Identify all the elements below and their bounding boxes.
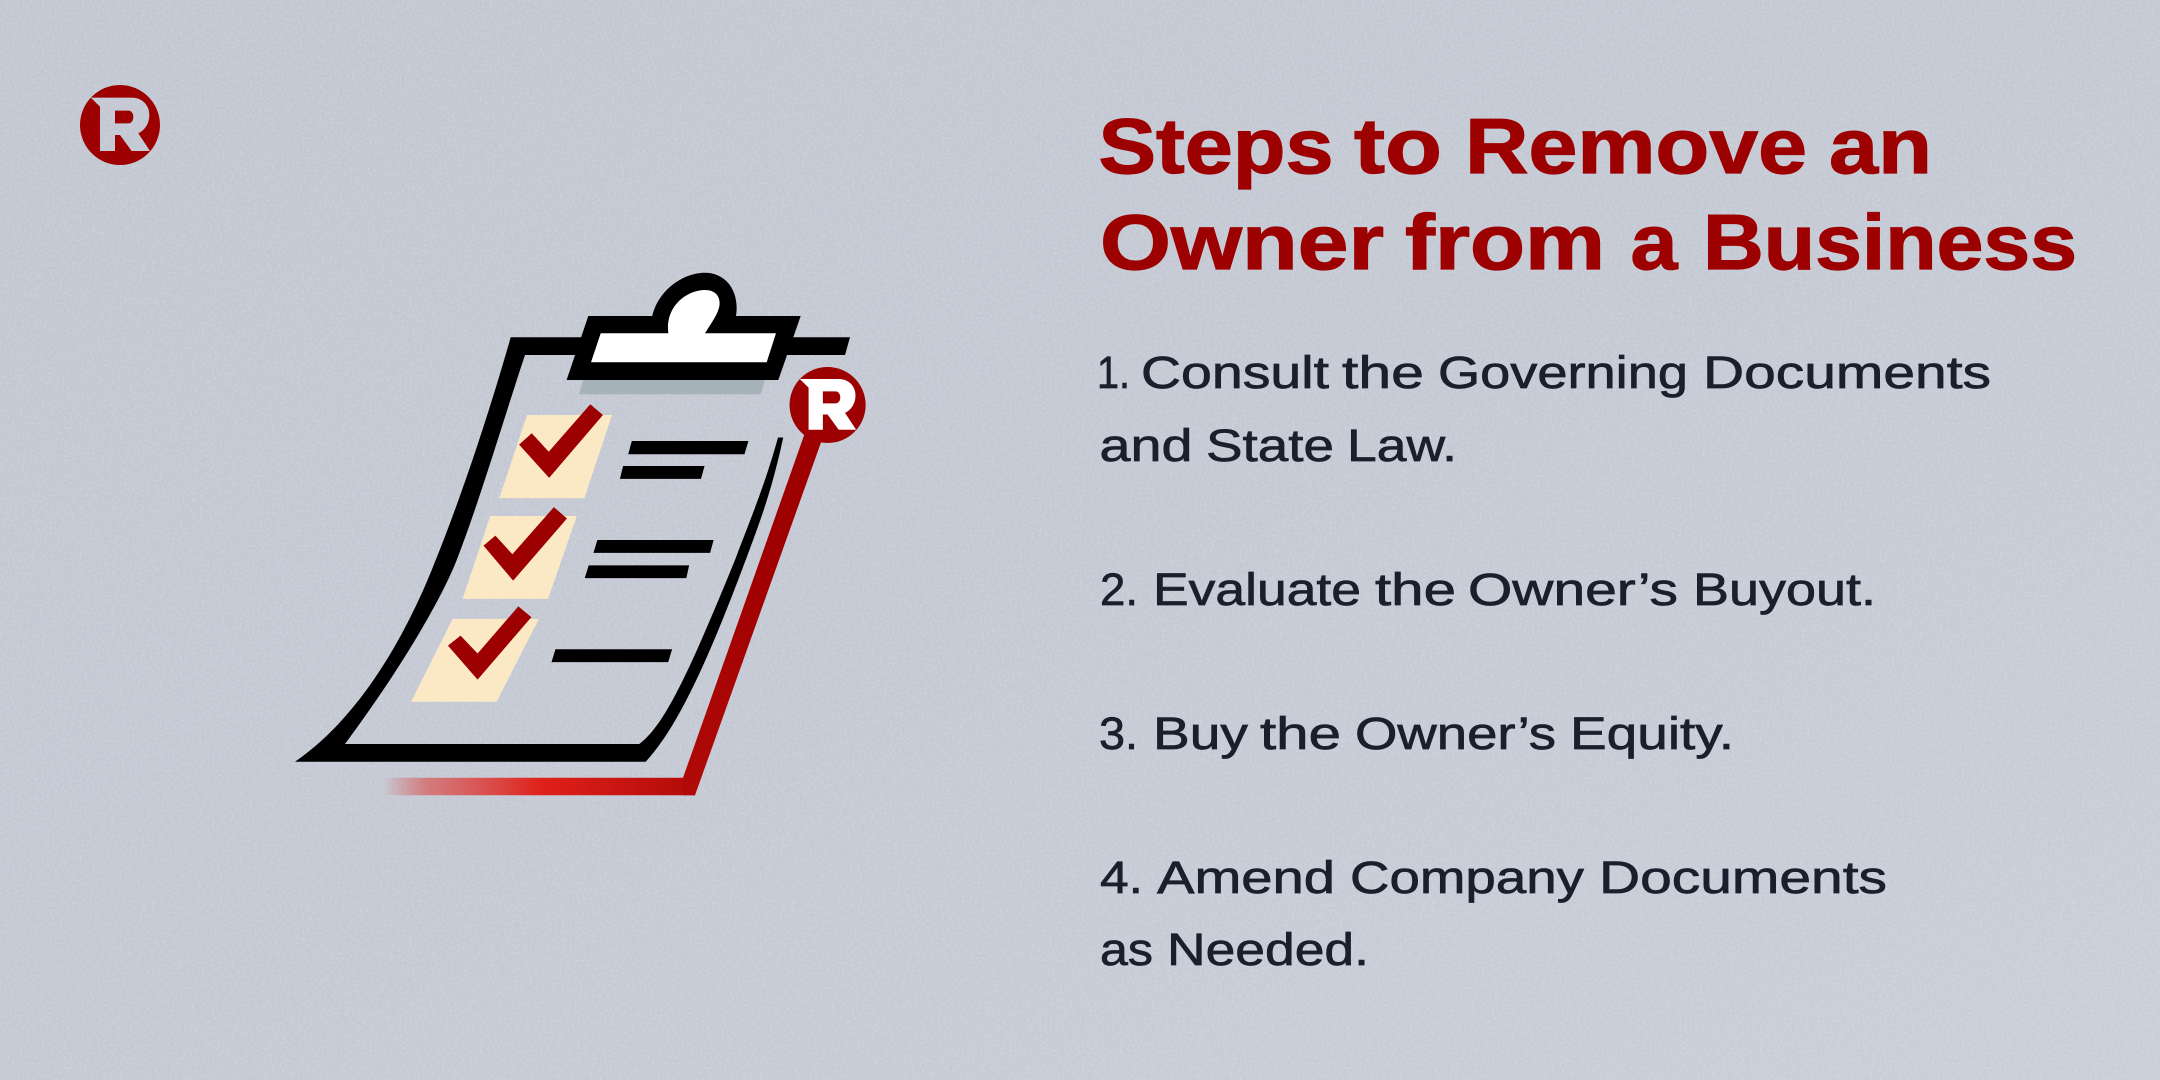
step 1: Governing [1438,347,1688,398]
step 4: Amend [1157,852,1335,903]
step 2: Owner’s [1468,564,1678,615]
step 1: and [1100,420,1192,471]
title: from [1405,198,1605,286]
title: a [1630,198,1678,286]
red back edge of the sheet [383,420,829,795]
step 2: Buyout. [1693,564,1876,615]
title: Business [1703,198,2077,286]
step 4: 4. [1100,852,1143,903]
step 1 [1097,347,1991,471]
step 3 [1099,708,1734,759]
step 4 [1100,852,1887,975]
clip [567,273,801,380]
clip shadow [579,380,765,394]
checklist row 2 [463,507,714,599]
sheet outline [295,337,850,762]
step 3: 3. [1099,708,1138,759]
title [1098,102,2077,286]
step 4: as [1100,924,1153,975]
step 3: the [1260,708,1341,759]
title: Owner [1100,198,1384,286]
step 1: Consult [1141,347,1329,398]
logo: R mark top left [80,85,160,165]
step 1: the [1342,347,1424,398]
title: Steps [1098,102,1334,190]
step 2 [1100,564,1876,615]
step 1: Documents [1703,347,1991,398]
illustration: clipboard checklist [295,273,850,795]
step 3: Equity. [1570,708,1734,759]
title: Remove [1465,102,1807,190]
step 4: Needed. [1167,924,1369,975]
step 3: Buy [1153,708,1248,759]
step 2: the [1375,564,1456,615]
step 1: Law. [1347,420,1457,471]
step 1: State [1206,420,1334,471]
title: an [1829,102,1932,190]
title: to [1354,102,1442,190]
step 2: 2. [1100,564,1138,615]
step 1: 1. [1097,347,1130,398]
icon: R badge on clipboard [790,367,866,443]
step 4: Documents [1599,852,1887,903]
checklist row 3 [411,606,672,702]
checklist row 1 [499,404,748,498]
step 4: Company [1350,852,1584,903]
step 3: Owner’s [1355,708,1556,759]
step 2: Evaluate [1153,564,1361,615]
